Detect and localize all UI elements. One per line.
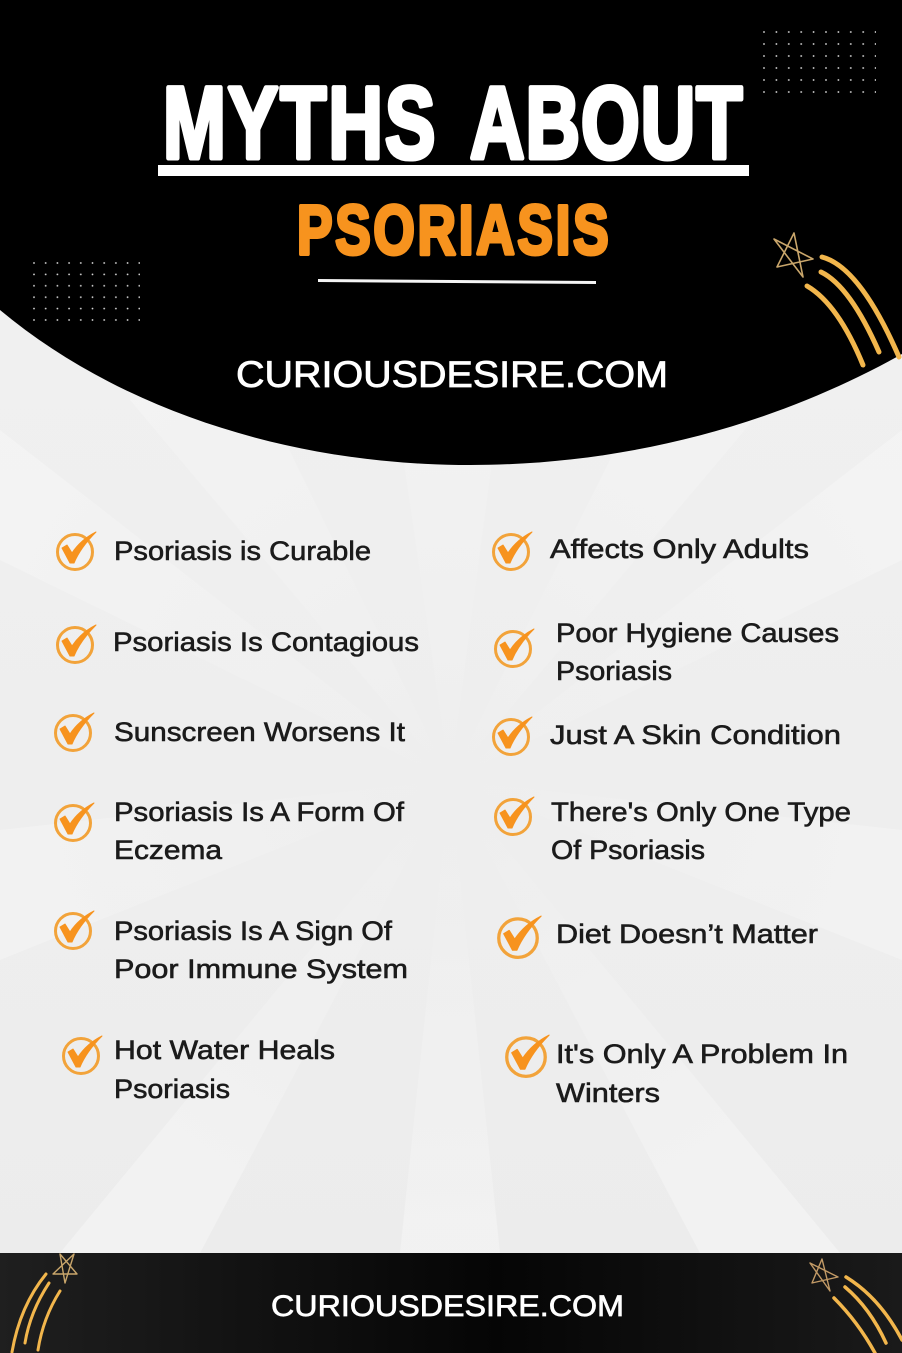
item: It's Only A Problem In Winters: It's Only A Problem In xyxy=(556,1039,848,1069)
check icon 9 xyxy=(494,717,532,754)
item: Poor Hygiene Causes Psoriasis xyxy=(556,618,839,686)
check icon 2 xyxy=(58,625,96,662)
dot grid left xyxy=(33,262,140,321)
subtitle: PSORIASIS xyxy=(297,192,609,270)
icon: shooting star top right xyxy=(774,233,899,365)
check icon 1 xyxy=(58,532,96,570)
divider line xyxy=(318,279,596,284)
header black arc panel xyxy=(0,0,902,465)
check icon 10 xyxy=(496,797,534,834)
item: Psoriasis Is Contagious: Psoriasis Is Contagious xyxy=(113,627,419,657)
title: MYTHS xyxy=(163,67,435,181)
item: Just A Skin Condition: Just A Skin Condition xyxy=(550,720,841,750)
check icon 8 xyxy=(496,629,534,666)
item: Psoriasis is Curable: Psoriasis is Curable xyxy=(114,536,371,566)
item: There's Only One Type Of Psoriasis xyxy=(551,797,851,865)
check icon 3 xyxy=(56,713,94,750)
title: ABOUT xyxy=(470,67,742,181)
check icon 5 xyxy=(56,911,94,948)
item: Psoriasis Is A Sign Of Poor Immune System xyxy=(114,916,408,984)
footer bar xyxy=(0,1253,902,1353)
myths list: left column xyxy=(56,532,419,1104)
item: It's Only A Problem In Winters: Winters xyxy=(556,1078,660,1108)
check icon 6 xyxy=(64,1036,102,1074)
website heading: CURIOUSDESIRE.COM xyxy=(236,354,668,395)
item: Hot Water Heals Psoriasis xyxy=(114,1035,335,1104)
dot grid top right xyxy=(763,31,876,93)
check icon 11 xyxy=(499,916,541,957)
footer website text: CURIOUSDESIRE.COM xyxy=(271,1290,624,1323)
item: Diet Doesn't Matter: Diet Doesn’t Matter xyxy=(556,919,818,949)
item: It's Only A Problem In Winters xyxy=(556,1039,848,1108)
icon: shooting star footer right xyxy=(810,1259,902,1353)
item: Psoriasis Is A Form Of Eczema: Psoriasis Is A Form Of xyxy=(114,797,405,827)
item: Psoriasis Is A Form Of Eczema xyxy=(114,797,405,865)
icon: shooting star footer left xyxy=(12,1254,77,1352)
item: There's Only One Type Of Psoriasis: Of Psoriasis xyxy=(551,835,705,865)
item: Affects Only Adults: Affects Only Adults xyxy=(550,534,809,564)
item: Poor Hygiene Causes Psoriasis: Poor Hygiene Causes xyxy=(556,618,839,648)
item: Psoriasis Is A Sign Of Poor Immune System: Psoriasis Is A Sign Of xyxy=(114,916,393,946)
check icon 7 xyxy=(494,532,532,570)
item: Sunscreen Worsens It: Sunscreen Worsens It xyxy=(114,717,406,747)
item: Psoriasis Is A Form Of Eczema: Eczema xyxy=(114,835,223,865)
myths list: right column xyxy=(494,532,851,1108)
item: Poor Hygiene Causes Psoriasis: Psoriasis xyxy=(556,656,672,686)
check icon 12 xyxy=(507,1035,549,1076)
item: Hot Water Heals Psoriasis: Psoriasis xyxy=(114,1074,230,1104)
check icon 4 xyxy=(56,803,94,840)
title xyxy=(158,67,749,181)
item: Hot Water Heals Psoriasis: Hot Water Heals xyxy=(114,1035,335,1065)
item: Psoriasis Is A Sign Of Poor Immune System: Poor Immune System xyxy=(114,954,408,984)
item: There's Only One Type Of Psoriasis: There's Only One Type xyxy=(551,797,851,827)
